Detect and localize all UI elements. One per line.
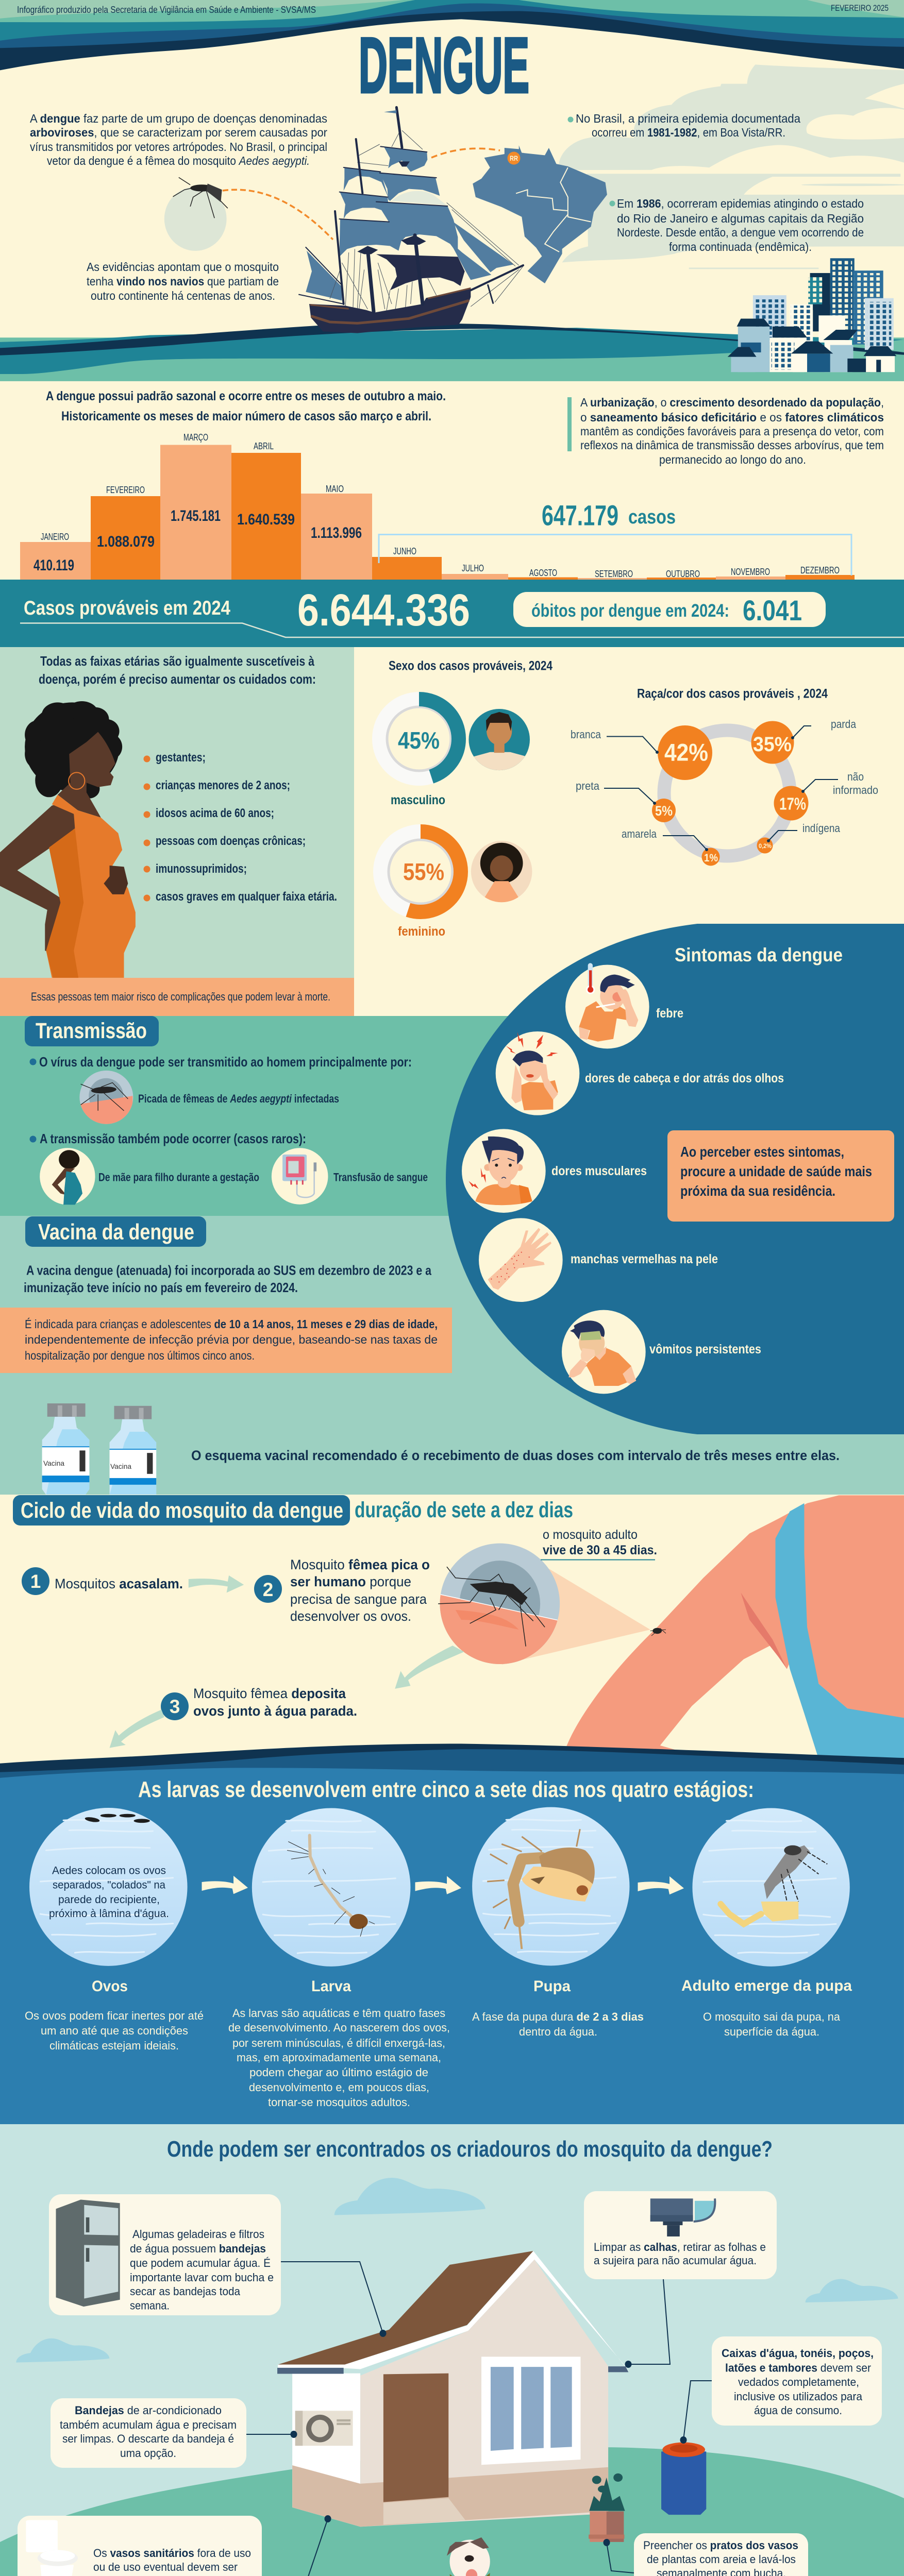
arrow: step 2 to 3 (395, 1646, 464, 1689)
illustration: house (277, 2251, 630, 2527)
text block: urbanization (567, 396, 884, 466)
donut chart: male 45% (379, 699, 459, 778)
icon: mosquito bite (75, 1071, 133, 1126)
text block: ships: outro continente há centenas de anos. (91, 289, 275, 302)
label: vomiting: vômitos persistentes (649, 1342, 761, 1357)
bar chart: monthly cases: MAIO (326, 484, 344, 494)
card: toilets: Os vasos sanitários fora de uso (93, 2547, 251, 2560)
icon: fever (565, 963, 649, 1048)
heading: transmission: Transmissão (36, 1019, 147, 1043)
bar chart: monthly cases: 1.088.079 (97, 533, 155, 550)
stage: eggs: Aedes colocam os ovos (52, 1865, 166, 1876)
arrow: step 1 to 2 (189, 1575, 244, 1592)
panel: mosquito life cycle (0, 1495, 904, 1773)
bar chart: monthly cases: MARÇO (183, 432, 208, 443)
step 2: 2 (263, 1579, 273, 1600)
bar chart: monthly cases: JUNHO (393, 546, 416, 556)
card: water tanks: Caixas d'água, tonéis, poços, (722, 2347, 874, 2360)
label: mother to child: De mãe para filho durante a gestação (98, 1171, 259, 1184)
heading: symptoms: Sintomas da dengue (675, 944, 843, 965)
text block: urbanization: o saneamento básico deficitário e os fatores climáticos (580, 411, 884, 424)
heading: vaccine (25, 1216, 206, 1247)
ring chart: race: não (847, 770, 864, 783)
stage: larva: mas, em aproximadamente uma semana, (237, 2051, 441, 2064)
label: febre: febre (656, 1006, 683, 1021)
list: at-risk groups (143, 751, 337, 904)
cloud restored under wave edge (747, 64, 904, 98)
stage: eggs: Os ovos podem ficar inertes por até (25, 2009, 204, 2022)
ring chart: race: 1% (704, 852, 718, 864)
illustration: arm with mosquito (438, 1495, 904, 1759)
stage: eggs: Ovos (92, 1978, 128, 1995)
icon: sailing ship (299, 107, 523, 333)
step 3: Mosquito fêmea deposita (193, 1686, 346, 1701)
heading: sex: Sexo dos casos prováveis, 2024 (389, 658, 553, 673)
callout: deaths (513, 592, 826, 627)
bar chart: monthly cases: 1.640.539 (237, 511, 295, 528)
text block: first epidemic: ocorreu em 1981-1982, em Boa Vista/RR. (592, 126, 785, 139)
card: plant saucers (634, 2533, 808, 2576)
list: at-risk groups: imunossuprimidos; (156, 862, 247, 876)
stage: adult (681, 1808, 852, 2038)
panel: at-risk groups (0, 647, 354, 1016)
card: plant saucers: Preencher os pratos dos vasos (643, 2539, 798, 2552)
card: AC trays: Bandejas de ar-condicionado (75, 2404, 222, 2417)
step 2: precisa de sangue para (290, 1591, 427, 1607)
text block: arboviroses: arboviroses, que se caracterizam por serem causadas por (30, 126, 327, 139)
step 3: ovos junto à água parada. (193, 1703, 357, 1719)
panel: seasonality (20, 389, 884, 580)
heading: at-risk groups: Todas as faixas etárias são igualmente suscetíveis à (40, 653, 314, 669)
bar chart: monthly cases: 1.113.996 (311, 524, 362, 541)
stage: adult: superfície da água. (724, 2025, 819, 2038)
card: AC trays: uma opção. (120, 2447, 176, 2460)
text: vaccine schedule: O esquema vacinal recomendado é o recebimento de duas doses com intervalo de três meses entre elas. (191, 1448, 840, 1463)
heading: vaccine: Vacina da dengue (38, 1220, 194, 1245)
panel: larval stages (0, 1743, 904, 2124)
heading: race: Raça/cor dos casos prováveis , 2024 (637, 686, 828, 701)
text block: arboviroses: vetor da dengue é a fêmea do mosquito Aedes aegypti. (47, 154, 310, 167)
icon: air conditioner (295, 2411, 353, 2446)
ring chart: race: 42% (664, 739, 708, 766)
text block: urbanization: A urbanização, o crescimento desordenado da população, (580, 396, 884, 409)
stage: larva: de desenvolvimento. Ao nascerem dos ovos, (228, 2021, 450, 2034)
text block: 1986: forma continuada (endêmica). (669, 240, 812, 253)
icon: headache (496, 1031, 579, 1115)
callout: 647.179 cases bracket (379, 499, 851, 575)
text block: urbanization: permanecido ao longo do ano. (659, 453, 806, 466)
ring chart: race: 35% (753, 733, 792, 756)
stage: eggs: próximo à lâmina d'água. (49, 1908, 169, 1920)
text block: first epidemic: No Brasil, a primeira epidemia documentada (576, 112, 800, 125)
panel background: vaccine (0, 1216, 904, 1495)
card: toilets: ou de uso eventual devem ser (93, 2561, 238, 2573)
hill (0, 2447, 904, 2576)
ring chart: race: 5% (655, 803, 673, 819)
heading: transmission (25, 1016, 159, 1046)
stage: pupa: dentro da água. (519, 2025, 597, 2038)
card: refrigerator: de água possuem bandejas (130, 2242, 266, 2255)
list: at-risk groups: pessoas com doenças crônicas; (156, 834, 306, 848)
label: masculino: masculino (391, 793, 445, 807)
callout: seek care: procure a unidade de saúde mais (680, 1163, 872, 1179)
bar chart: monthly cases: SETEMBRO (595, 569, 633, 579)
note: risk: Essas pessoas tem maior risco de complicações que podem levar à morte. (31, 990, 330, 1003)
panel: race of cases (571, 686, 878, 866)
icon: vaccine vials: Vacina (43, 1459, 64, 1467)
heading: seasonality: Historicamente os meses de maior número de casos são março e abril. (61, 409, 431, 423)
stage: eggs: separados, "colados" na (53, 1879, 165, 1891)
sky clouds (16, 2178, 898, 2363)
bottom waves of header (0, 323, 904, 381)
callout: vaccine indication: independentemente de infecção prévia por dengue, baseando-se nas taxas de (25, 1333, 438, 1346)
bar chart: monthly cases: JULHO (462, 563, 484, 573)
ring chart: race: 17% (779, 794, 806, 813)
icon: woman (471, 841, 532, 903)
panel: transmission (25, 1016, 428, 1205)
card: plant saucers: de plantas com areia e lavá-los (647, 2553, 796, 2566)
card: gutters: a sujeira para não acumular água. (594, 2254, 757, 2267)
icon: pregnant woman small (40, 1148, 95, 1205)
callout: seek care: Ao perceber estes sintomas, (680, 1144, 844, 1160)
bar chart: monthly cases: 410.119 (34, 557, 74, 574)
bar chart: monthly cases: OUTUBRO (666, 569, 700, 579)
card: AC trays: também acumulam água e precisam (60, 2418, 237, 2431)
heading: seasonality (46, 389, 446, 423)
label: muscle pain: dores musculares (551, 1164, 647, 1178)
icon: potted plant (589, 2473, 625, 2542)
arrow: ship to Roraima (431, 148, 500, 158)
card: water tanks: latões e tambores devem ser (725, 2362, 871, 2374)
card: toilets (18, 2516, 262, 2576)
ring chart: race: indígena (802, 822, 841, 835)
step 1 (22, 1567, 183, 1595)
bar chart: monthly cases: ABRIL (254, 441, 274, 451)
panel: header and history of dengue (0, 0, 904, 381)
icon: pregnant woman (0, 701, 136, 978)
icon: map of Brazil (473, 145, 607, 283)
stage: pupa (472, 1807, 644, 2038)
date: FEVEREIRO 2025 (831, 3, 889, 13)
heading: seasonality: A dengue possui padrão sazonal e ocorre entre os meses de outubro a maio. (46, 389, 446, 403)
ring chart: race: preta (576, 779, 600, 792)
stage: larva: por serem minúsculas, é difícil enxergá-las, (232, 2037, 445, 2049)
step 3 (161, 1686, 357, 1720)
card: refrigerator: importante lavar com bucha e (130, 2271, 274, 2284)
card: refrigerator: semana. (130, 2299, 170, 2312)
top waves (0, 0, 904, 84)
icon: dog (432, 2537, 493, 2576)
label: transfusion: Transfusão de sangue (333, 1171, 428, 1184)
stage: larva: desenvolvimento e, em poucos dias, (249, 2081, 429, 2094)
arrow: step 3 onward (110, 1710, 164, 1748)
step 1: 1 (30, 1571, 41, 1592)
subheading: duration: duração de sete a dez dias (355, 1498, 573, 1522)
callout: seek care (667, 1130, 894, 1222)
bar chart: monthly cases: AGOSTO (529, 568, 557, 578)
callout: deaths: óbitos por dengue em 2024: (531, 601, 729, 621)
donut chart: male 45%: 45% (398, 727, 440, 754)
step 2: Mosquito fêmea pica o (290, 1557, 430, 1572)
bar chart: monthly cases: DEZEMBRO (800, 565, 840, 575)
arrow: mosquito to ship (223, 190, 333, 240)
bar chart: monthly cases: NOVEMBRO (731, 567, 770, 577)
callout: vaccine indication (0, 1308, 452, 1373)
badge: Roraima (507, 151, 521, 165)
stage: larva (228, 1808, 450, 2109)
text: rare transmission: A transmissão também pode ocorrer (casos raros): (40, 1131, 306, 1146)
callout: adult lifespan: vive de 30 a 45 dias. (543, 1543, 657, 1557)
text block: 1986: Em 1986, ocorreram epidemias atingindo o estado (617, 197, 864, 210)
text: main transmission: O vírus da dengue pode ser transmitido ao homem principalmente por: (39, 1054, 412, 1070)
icon: vaccine vials: Vacina (110, 1462, 131, 1470)
label: probable cases: Casos prováveis em 2024 (24, 597, 230, 619)
callout: 647.179 cases bracket: casos (628, 506, 676, 528)
step 1: Mosquitos acasalam. (55, 1576, 183, 1591)
text block: ships: As evidências apontam que o mosquito (87, 260, 279, 274)
label: red patches: manchas vermelhas na pele (571, 1252, 718, 1266)
callout: 647.179 cases bracket: 647.179 (542, 499, 618, 532)
step 2 (254, 1557, 430, 1624)
text block: first epidemic (568, 112, 800, 139)
callout: deaths: 6.041 (743, 594, 802, 626)
arrow: eggs to larva (202, 1876, 248, 1894)
stage: eggs: climáticas estejam ideiais. (49, 2039, 179, 2052)
stage: pupa: A fase da pupa dura de 2 a 3 dias (472, 2010, 644, 2023)
list: at-risk groups: casos graves em qualquer faixa etária. (156, 890, 337, 904)
stage: adult: Adulto emerge da pupa (681, 1977, 852, 1994)
card: gutters (584, 2191, 777, 2279)
ring chart: race: 0,2% (759, 842, 772, 850)
stage: eggs (25, 1808, 204, 2052)
text block: ships (87, 260, 279, 302)
callout: adult lifespan (541, 1528, 657, 1560)
donut chart: female 55% (380, 832, 461, 912)
text block: ships: tenha vindo nos navios que partiam de (87, 275, 279, 288)
text block: 1986: Nordeste. Desde então, a dengue vem ocorrendo de (617, 226, 864, 239)
icon: water drum (661, 2442, 706, 2515)
callout: seek care: próxima da sua residência. (680, 1183, 835, 1199)
panel: symptoms (446, 924, 904, 1434)
leaders: house connectors (136, 2262, 774, 2576)
panel: sex of cases (379, 658, 553, 939)
icon: man (468, 709, 530, 773)
card: refrigerator: Algumas geladeiras e filtros (132, 2228, 264, 2241)
icon: muscle pain (462, 1129, 546, 1213)
label: head pain: dores de cabeça e dor atrás dos olhos (585, 1071, 784, 1086)
text block: 1986: do Rio de Janeiro e algumas capitais da Região (617, 212, 864, 225)
bar chart: monthly cases (20, 432, 855, 580)
list: at-risk groups: gestantes; (156, 751, 206, 765)
bar chart: monthly cases: FEVEREIRO (106, 485, 145, 495)
heading: breeding sites: Onde podem ser encontrados os criadouros do mosquito da dengue? (167, 2137, 773, 2162)
card: AC trays: ser limpas. O descarte da bandeja é (62, 2432, 234, 2445)
step 3: 3 (170, 1696, 180, 1717)
callout: adult lifespan: o mosquito adulto (543, 1528, 638, 1542)
title: DENGUE (359, 22, 529, 109)
card: AC trays (51, 2398, 246, 2468)
text block: arboviroses (30, 112, 327, 167)
donut chart: female 55%: 55% (403, 858, 444, 885)
background clouds (559, 64, 904, 269)
step 2: ser humano porque (290, 1574, 411, 1589)
heading: life cycle (13, 1495, 350, 1526)
stage: adult: O mosquito sai da pupa, na (703, 2010, 841, 2023)
callout: vaccine indication: hospitalização por dengue nos últimos cinco anos. (25, 1349, 255, 1362)
bar chart: monthly cases: JANEIRO (41, 532, 69, 542)
label: bite: Picada de fêmeas de Aedes aegypti infectadas (138, 1092, 339, 1105)
text block: arboviroses: vírus transmitidos por vetores artrópodes. No Brasil, o principal (30, 140, 327, 154)
icon: vaccine vials (42, 1403, 156, 1495)
stage: larva: podem chegar ao último estágio de (249, 2066, 428, 2079)
stage: larva: Larva (311, 1978, 351, 1995)
heading: at-risk groups (39, 653, 316, 687)
text: vaccine incorporation: imunização teve início no país em fevereiro de 2024. (24, 1280, 298, 1295)
ring chart: race: parda (831, 718, 857, 731)
card: refrigerator: que podem acumular água. É (130, 2257, 271, 2269)
text block: 1986 (609, 197, 864, 253)
stage: eggs: parede do recipiente, (58, 1894, 160, 1906)
credit line: Infográfico produzido pela Secretaria de Vigilância em Saúde e Ambiente - SVSA/MS (17, 5, 316, 15)
list: at-risk groups: crianças menores de 2 anos; (156, 778, 290, 792)
text: vaccine incorporation (24, 1262, 431, 1295)
stage: larva: As larvas são aquáticas e têm quatro fases (232, 2007, 445, 2020)
ring chart: race: informado (833, 784, 878, 796)
badge: Roraima: RR (510, 154, 518, 162)
panel: vaccine (0, 1216, 840, 1495)
stage: larva: tornar-se mosquitos adultos. (268, 2096, 410, 2109)
number: total cases: 6.644.336 (297, 585, 470, 635)
callout: vaccine indication: É indicada para crianças e adolescentes de 10 a 14 anos, 11 meses e 29 dias de idade, (25, 1317, 438, 1331)
ring chart: race: amarela (622, 827, 657, 840)
text block: arboviroses: A dengue faz parte de um grupo de doenças denominadas (30, 112, 327, 125)
arrow: larva to pupa (415, 1876, 461, 1894)
icon: mosquito (164, 177, 228, 251)
bar chart: monthly cases: 1.745.181 (171, 507, 221, 524)
ring chart: race: branca (571, 728, 601, 741)
card: water tanks: água de consumo. (754, 2404, 842, 2417)
card: water tanks: vedados completamente, (738, 2376, 859, 2388)
text: vaccine incorporation: A vacina dengue (atenuada) foi incorporada ao SUS em dezembro de 2023 e a (26, 1262, 431, 1278)
stage: pupa: Pupa (533, 1978, 571, 1995)
panel: 2024 totals band (0, 580, 904, 647)
icon: city buildings (728, 258, 896, 372)
icon: rash on hand (479, 1218, 563, 1302)
list: at-risk groups: idosos acima de 60 anos; (156, 806, 274, 820)
icon: vomiting (562, 1310, 646, 1394)
card: water tanks: inclusive os utilizados para (734, 2390, 863, 2403)
card: refrigerator (49, 2194, 281, 2315)
ring chart: race (571, 718, 878, 866)
stage: eggs: um ano até que as condições (41, 2024, 188, 2037)
card: water tanks (712, 2336, 882, 2426)
heading: life cycle: Ciclo de vida do mosquito da dengue (21, 1498, 343, 1523)
arrow: pupa to adult (638, 1876, 684, 1894)
panel background: transmission (0, 1016, 521, 1216)
heading: at-risk groups: doença, porém é preciso aumentar os cuidados com: (39, 671, 316, 687)
card: refrigerator: secar as bandejas toda (130, 2285, 241, 2298)
heading: larval stages: As larvas se desenvolvem entre cinco a sete dias nos quatro estágios: (138, 1777, 754, 1802)
panel: breeding sites (0, 2124, 904, 2576)
label: feminino: feminino (398, 924, 445, 939)
icon: blood bag (272, 1148, 328, 1205)
card: gutters: Limpar as calhas, retirar as folhas e (594, 2241, 766, 2253)
step 2: desenvolver os ovos. (290, 1608, 411, 1624)
